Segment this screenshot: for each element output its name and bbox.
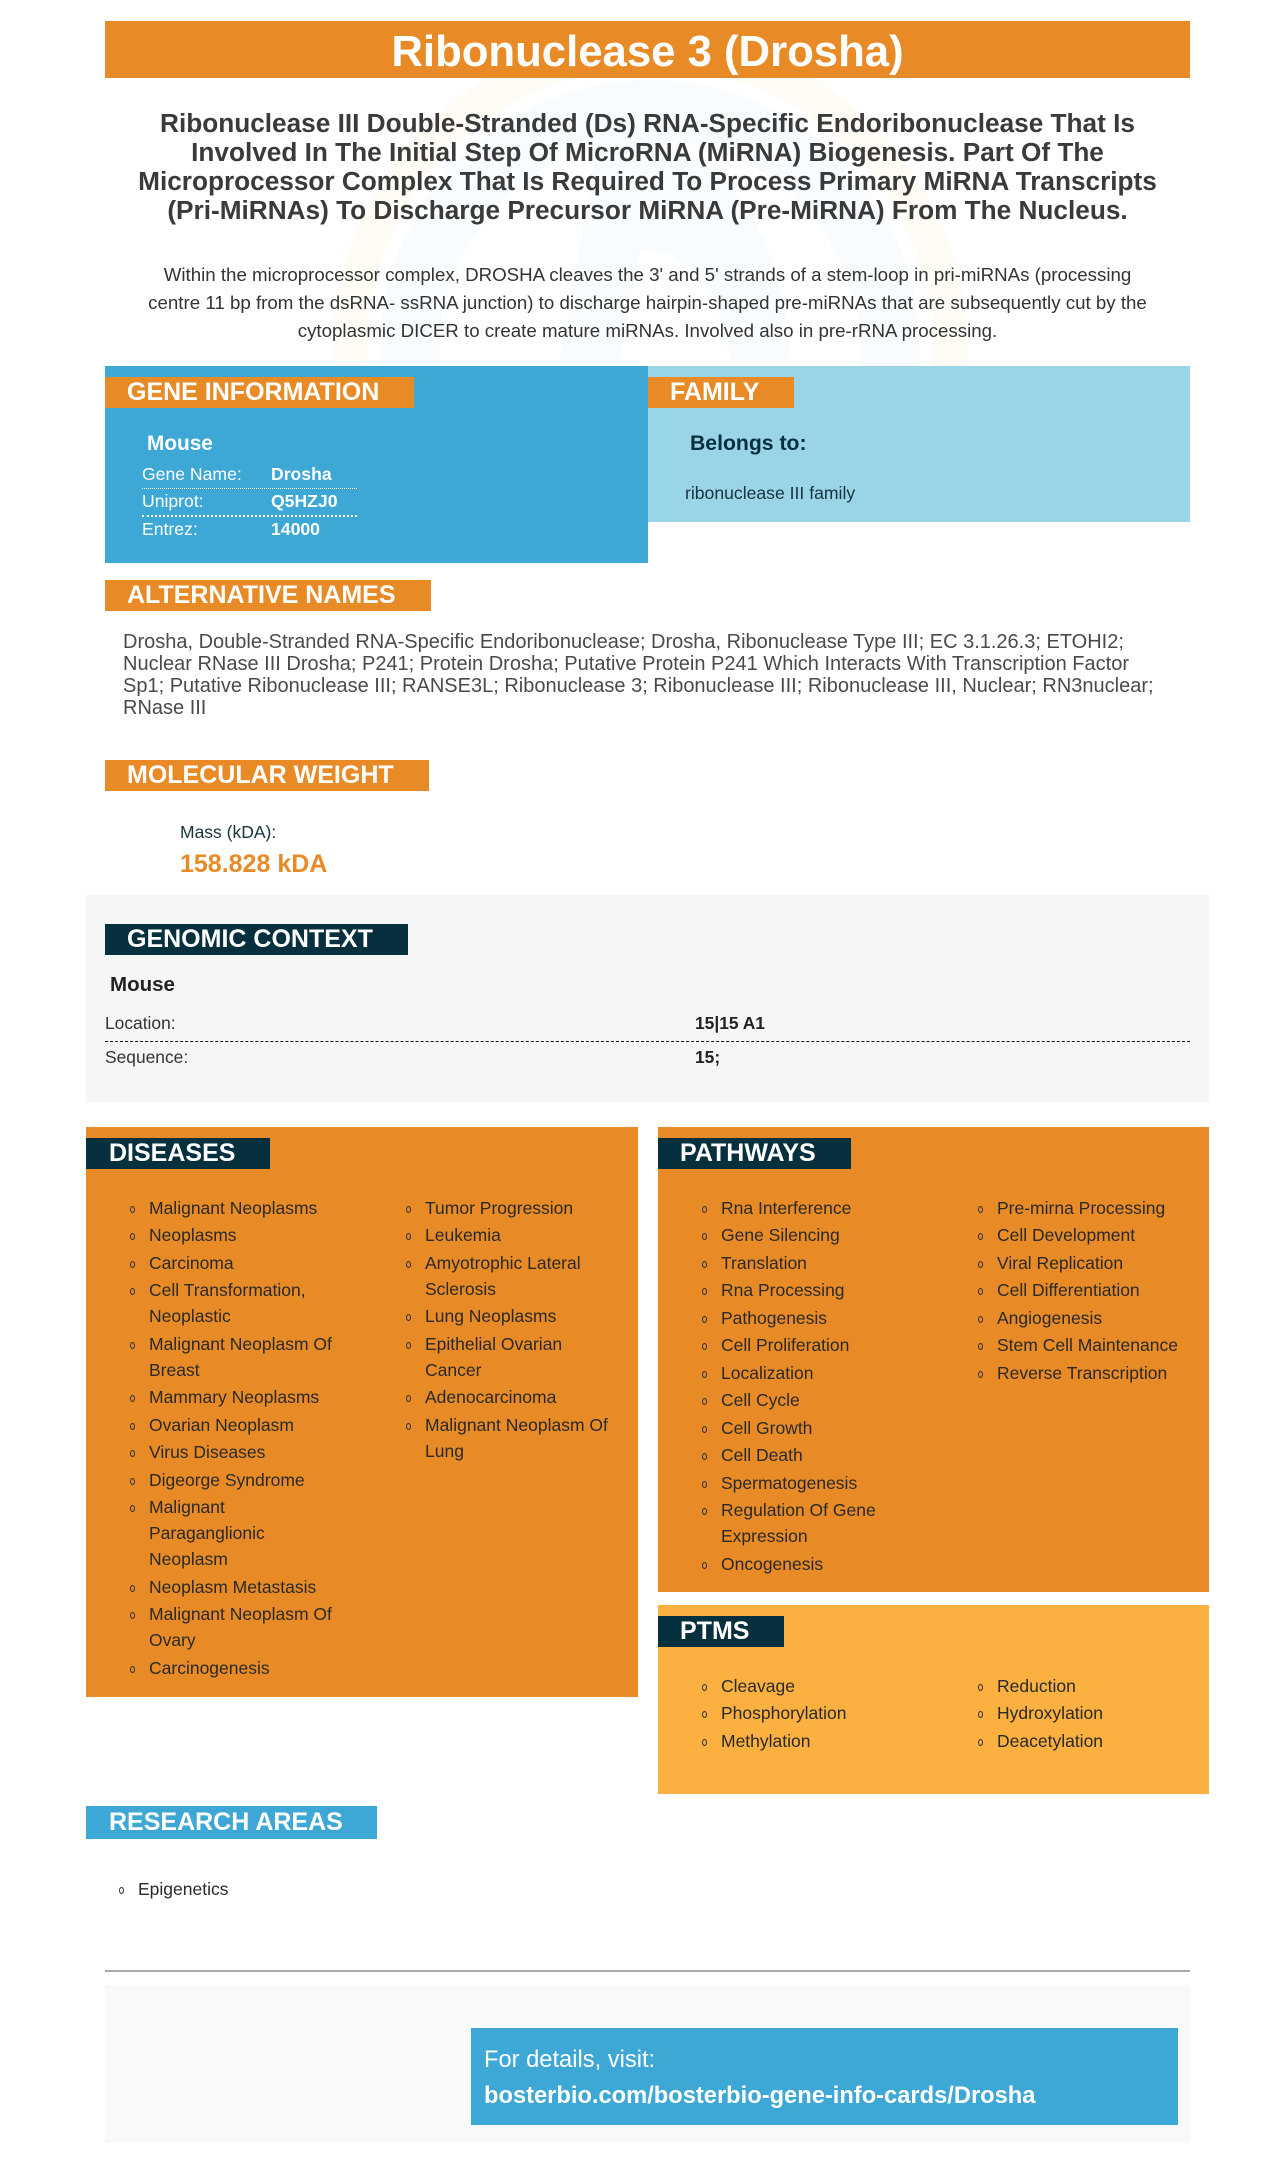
mass value: 158.828 kDA [180, 850, 327, 878]
heading: research areas: RESEARCH AREAS [109, 1808, 343, 1836]
diseases list column 2: Malignant Neoplasm Of [425, 1415, 608, 1435]
footer divider [105, 1970, 1190, 1972]
gene name row [142, 464, 357, 489]
pathways list column 1: Translation [721, 1253, 807, 1273]
diseases list column 1: Cell Transformation, [149, 1280, 306, 1300]
footer panel [105, 1970, 1190, 2125]
pathways list column 2: Cell Development [997, 1225, 1135, 1245]
mass label: Mass (kDA): [180, 822, 276, 842]
ptms list column 2: Hydroxylation [997, 1703, 1103, 1723]
heading: ptms [658, 1616, 784, 1647]
panel: ptms [658, 1605, 1209, 1794]
heading: molecular weight: MOLECULAR WEIGHT [127, 761, 394, 789]
diseases list column 1: Neoplasms [149, 1225, 237, 1245]
subtitle description [138, 108, 1157, 225]
diseases list column 1: Virus Diseases [149, 1442, 265, 1462]
entrez row: Entrez: [142, 519, 198, 539]
heading: gene information: GENE INFORMATION [127, 378, 379, 406]
heading: family: FAMILY [670, 378, 759, 406]
title: Ribonuclease 3 (Drosha) [391, 27, 904, 76]
heading: ptms: PTMS [680, 1617, 749, 1645]
heading: pathways: PATHWAYS [680, 1139, 816, 1167]
diseases list column 1: Neoplasm Metastasis [149, 1577, 316, 1597]
uniprot row: Q5HZJ0 [271, 491, 338, 511]
pathways list column 1: Gene Silencing [721, 1225, 840, 1245]
gene name row: Drosha [271, 464, 332, 484]
diseases list column 2: Amyotrophic Lateral [425, 1253, 581, 1273]
details label: For details, visit: [484, 2047, 655, 2073]
details url: bosterbio.com/bosterbio-gene-info-cards/Drosha [484, 2083, 1035, 2109]
species label: Mouse [110, 973, 175, 996]
pathways list column 1: Pathogenesis [721, 1308, 827, 1328]
ptms list column 1: Phosphorylation [721, 1703, 846, 1723]
diseases list column 1: Ovary [149, 1630, 196, 1650]
title [105, 21, 1190, 78]
research areas list: Epigenetics [138, 1879, 228, 1899]
subtitle description: Microprocessor Complex That Is Required To Process Primary MiRNA Transcripts [138, 166, 1157, 196]
ptms list column 1 [702, 1676, 846, 1751]
diseases list column 1: Mammary Neoplasms [149, 1387, 319, 1407]
panel: gene information [105, 366, 648, 563]
diseases list column 1: Malignant Neoplasm Of [149, 1604, 332, 1624]
pathways list column 1 [702, 1198, 876, 1574]
diseases list column 1: Carcinogenesis [149, 1658, 270, 1678]
belongs to label: Belongs to: [690, 432, 807, 455]
pathways list column 1: Spermatogenesis [721, 1473, 857, 1493]
pathways list column 1: Cell Cycle [721, 1390, 800, 1410]
pathways list column 1: Cell Proliferation [721, 1335, 849, 1355]
ptms list column 2: Reduction [997, 1676, 1076, 1696]
heading: pathways [658, 1138, 851, 1169]
diseases list column 1: Neoplasm [149, 1549, 228, 1569]
diseases list column 2: Adenocarcinoma [425, 1387, 556, 1407]
function paragraph [148, 264, 1147, 341]
pathways list column 2 [978, 1198, 1178, 1383]
pathways list column 2: Viral Replication [997, 1253, 1123, 1273]
alternative names text [123, 631, 1154, 719]
heading: family [648, 377, 794, 408]
sequence row [105, 1047, 720, 1067]
heading: diseases: DISEASES [109, 1139, 235, 1167]
alternative names text: Drosha, Double-Stranded RNA-Specific Endoribonuclease; Drosha, Ribonuclease Type III; EC 3.1.26.3; ETOHI2; [123, 631, 1124, 653]
pathways list column 1: Rna Processing [721, 1280, 845, 1300]
function paragraph: centre 11 bp from the dsRNA- ssRNA junction) to discharge hairpin-shaped pre-miRNAs that are subsequently cut by the [148, 292, 1147, 313]
heading: alternative names: ALTERNATIVE NAMES [127, 581, 396, 609]
entrez row [142, 519, 320, 539]
diseases list column 2 [406, 1198, 608, 1461]
species label: Mouse [147, 432, 213, 455]
diseases list column 1: Malignant Neoplasm Of [149, 1334, 332, 1354]
diseases list column 2: Epithelial Ovarian [425, 1334, 562, 1354]
heading: diseases [86, 1138, 270, 1169]
function paragraph: cytoplasmic DICER to create mature miRNAs. Involved also in pre-rRNA processing. [298, 320, 997, 341]
panel: genomic context [86, 895, 1209, 1102]
function paragraph: Within the microprocessor complex, DROSHA cleaves the 3' and 5' strands of a stem-loop in pri-miRNAs (processing [164, 264, 1131, 285]
location row: Location: [105, 1013, 176, 1033]
panel: diseases [86, 1127, 638, 1697]
gene name row: Gene Name: [142, 464, 242, 484]
pathways list column 2: Angiogenesis [997, 1308, 1102, 1328]
pathways list column 1: Regulation Of Gene [721, 1500, 876, 1520]
pathways list column 1: Cell Death [721, 1445, 803, 1465]
alternative names text: Sp1; Putative Ribonuclease III; RANSE3L; Ribonuclease 3; Ribonuclease III; Ribonuclease III, Nuclear; RN3nuclear; [123, 675, 1154, 697]
diseases list column 2: Lung [425, 1441, 464, 1461]
diseases list column 2: Leukemia [425, 1225, 501, 1245]
diseases list column 1: Malignant [149, 1497, 225, 1517]
diseases list column 1: Breast [149, 1360, 200, 1380]
diseases list column 1: Malignant Neoplasms [149, 1198, 317, 1218]
ptms list column 2 [978, 1676, 1103, 1751]
subtitle description: Involved In The Initial Step Of MicroRNA (MiRNA) Biogenesis. Part Of The [191, 137, 1104, 167]
pathways list column 1: Cell Growth [721, 1418, 812, 1438]
pathways list column 1: Oncogenesis [721, 1554, 823, 1574]
diseases list column 1: Neoplastic [149, 1306, 231, 1326]
location row: 15|15 A1 [695, 1013, 765, 1033]
entrez row: 14000 [271, 519, 320, 539]
background watermark logo [333, 78, 967, 366]
uniprot row: Uniprot: [142, 491, 204, 511]
diseases list column 2: Sclerosis [425, 1279, 496, 1299]
pathways list column 1: Localization [721, 1363, 813, 1383]
diseases list column 1: Paraganglionic [149, 1523, 265, 1543]
ptms list column 1: Methylation [721, 1731, 810, 1751]
pathways list column 2: Cell Differentiation [997, 1280, 1140, 1300]
pathways list column 2: Reverse Transcription [997, 1363, 1167, 1383]
pathways list column 1: Expression [721, 1526, 808, 1546]
subtitle description: (Pri-MiRNAs) To Discharge Precursor MiRNA (Pre-MiRNA) From The Nucleus. [167, 195, 1128, 225]
panel: pathways [658, 1127, 1209, 1592]
sequence row: 15; [695, 1047, 720, 1067]
heading: genomic context: GENOMIC CONTEXT [127, 925, 373, 953]
pathways list column 2: Pre-mirna Processing [997, 1198, 1165, 1218]
sequence row: Sequence: [105, 1047, 188, 1067]
pathways list column 2: Stem Cell Maintenance [997, 1335, 1178, 1355]
diseases list column 2: Tumor Progression [425, 1198, 573, 1218]
uniprot row [142, 491, 357, 517]
diseases list column 1: Carcinoma [149, 1253, 234, 1273]
ptms list column 1: Cleavage [721, 1676, 795, 1696]
subtitle description: Ribonuclease III Double-Stranded (Ds) RNA-Specific Endoribonuclease That Is [160, 108, 1135, 138]
diseases list column 2: Lung Neoplasms [425, 1306, 556, 1326]
heading: research areas [86, 1806, 377, 1839]
details link box [471, 2028, 1178, 2125]
ptms list column 2: Deacetylation [997, 1731, 1103, 1751]
diseases list column 1 [130, 1198, 332, 1678]
family value: ribonuclease III family [685, 483, 855, 503]
diseases list column 2: Cancer [425, 1360, 481, 1380]
footer background [105, 1985, 1190, 2143]
diseases list column 1: Digeorge Syndrome [149, 1470, 305, 1490]
diseases list column 1: Ovarian Neoplasm [149, 1415, 294, 1435]
panel: family [648, 366, 1190, 522]
alternative names text: Nuclear RNase III Drosha; P241; Protein Drosha; Putative Protein P241 Which Interacts With Transcription Factor [123, 653, 1129, 675]
pathways list column 1: Rna Interference [721, 1198, 851, 1218]
location row [105, 1013, 1190, 1042]
alternative names text: RNase III [123, 697, 206, 719]
